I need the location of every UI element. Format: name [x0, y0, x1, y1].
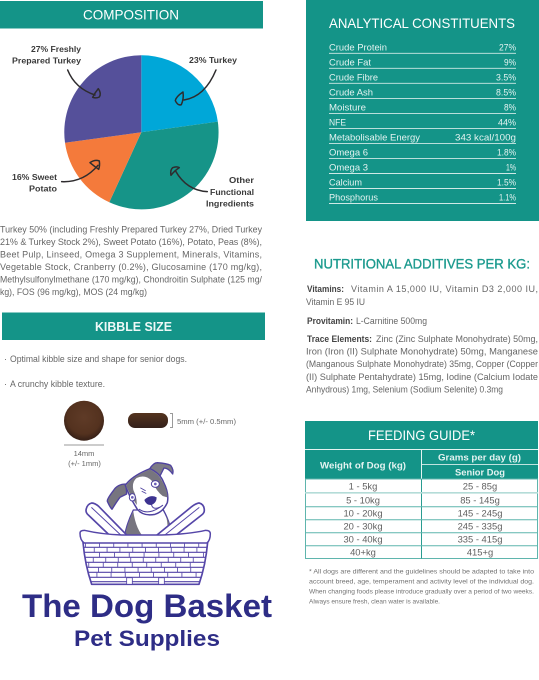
text block: additives: Vitamins: [307, 284, 344, 294]
text block: additives: Anhydrous) 1mg, Selenium (Sodium Selenite) 0.3mg [306, 384, 503, 394]
feeding guide rows: 25 - 85g [463, 480, 497, 492]
feeding guide rows: 335 - 415g [458, 534, 502, 544]
feeding guide rows: 40+kg [350, 546, 376, 558]
text block: feeding footnote: When changing foods please introduce gradually over a period of two weeks. [309, 589, 534, 596]
table: constituents rows: 8% [504, 102, 516, 114]
feeding guide header: Grams per day (g) [438, 452, 521, 464]
table: constituents rows: 44% [498, 118, 517, 128]
feeding guide rows: 20 - 30kg [343, 520, 383, 532]
text block: composition ingredients: 21% & Turkey Stock 2%), Sweet Potato (16%), Potato, Peas (8%), [0, 237, 262, 247]
table: constituents rows: 343 kcal/100g [455, 132, 516, 144]
feeding guide rows: 5 - 10kg [346, 494, 380, 506]
pie labels and arrows: 27% Freshly [31, 44, 81, 54]
table: constituents rows: 27% [499, 42, 516, 54]
logo: dog in a basket [80, 463, 210, 584]
text block: additives: Vitamin A 15,000 IU, Vitamin D3 2,000 IU, [351, 284, 538, 294]
icon: kibble side view: 5mm (+/- 0.5mm) [177, 417, 237, 426]
table: constituents rows: Crude Ash [329, 88, 373, 98]
table: constituents rows: Calcium [329, 178, 362, 188]
text block: kibble bullets: A crunchy kibble texture. [10, 379, 105, 389]
panel: analytical constituents [306, 0, 539, 221]
table: constituents rows: Omega 3 [329, 162, 368, 174]
table: constituents rows: 1.5% [497, 178, 516, 188]
basket body [83, 542, 208, 584]
text block: additives: Provitamin: [307, 316, 353, 326]
icon: kibble side view [128, 413, 237, 428]
icon: kibble top view [64, 401, 104, 468]
text block: kibble bullets [4, 354, 187, 389]
panel: kibble size heading [2, 312, 265, 340]
text block: feeding footnote: * All dogs are different and the guidelines should be adapted to take into [309, 568, 534, 575]
table: constituents rows: Omega 6 [329, 148, 368, 158]
text block: composition ingredients: Methylsulfonylmethane (170 mg/kg), Chondroitin Sulphate (125 mg/ [0, 274, 262, 284]
table: feeding guide [305, 421, 538, 558]
table: constituents rows [329, 42, 517, 204]
pie labels and arrows: Other [229, 175, 255, 185]
heading: analytical constituents: ANALYTICAL CONSTITUENTS [329, 15, 515, 31]
text block: composition ingredients: kg), FOS (96 mg/kg), MOS (24 mg/kg) [0, 287, 147, 297]
feeding guide rows: 245 - 335g [458, 520, 502, 532]
text block: feeding footnote: account breed, age, temperament and activity level of the individual dog. [309, 578, 534, 586]
table: constituents rows: Moisture [329, 102, 366, 114]
table: constituents rows: Crude Fat [329, 58, 371, 68]
icon: kibble top view: (+/- 1mm) [68, 459, 101, 468]
feeding guide rows: 145 - 245g [458, 508, 502, 518]
pie labels and arrows: Functional [210, 187, 254, 197]
text block: additives: Trace Elements: [307, 334, 372, 344]
text block: composition ingredients: Beet Pulp, Linseed, Omega 3 Supplement, Minerals, Vitamins, [0, 250, 262, 260]
table: constituents rows: 1.8% [497, 148, 516, 158]
table: constituents rows: Crude Protein [329, 42, 387, 54]
feeding guide header: FEEDING GUIDE* [368, 427, 476, 443]
text block: feeding footnote [309, 568, 534, 606]
text block: composition ingredients: Turkey 50% (including Freshly Prepared Turkey 27%, Dried Turkey [0, 224, 262, 234]
table: constituents rows: 1.1% [499, 192, 516, 204]
panel: composition heading: COMPOSITION [83, 6, 179, 22]
table: constituents rows: 8.5% [496, 88, 517, 98]
table: constituents rows: NFE [329, 118, 346, 128]
text block: kibble bullets: · [4, 354, 7, 364]
feeding guide rows [305, 479, 538, 558]
text block: additives [306, 284, 538, 394]
icon: kibble top view: 14mm [74, 449, 94, 458]
table: constituents rows: 1% [506, 162, 516, 174]
feeding guide header: Senior Dog [455, 468, 505, 478]
basket rim [80, 530, 210, 543]
text block: additives: Zinc (Zinc Sulphate Monohydrate) 50mg, [376, 334, 538, 344]
text block: additives: Iron (Iron (II) Sulphate Monohydrate) 50mg, Manganese [306, 347, 538, 357]
text block: additives: L-Carnitine 500mg [356, 316, 427, 326]
table: constituents rows: Phosphorus [329, 192, 378, 204]
dog [107, 463, 173, 539]
logo text: Pet Supplies: Pet Supplies [74, 626, 220, 651]
text block: kibble bullets: Optimal kibble size and shape for senior dogs. [10, 354, 187, 364]
table: constituents rows: Metabolisable Energy [329, 132, 420, 144]
pie labels and arrows: 16% Sweet [12, 172, 57, 182]
pie labels and arrows: 23% Turkey [189, 55, 237, 65]
feeding guide header: Weight of Dog (kg) [320, 460, 406, 472]
text block: additives: Vitamin E 95 IU [306, 297, 365, 307]
pie chart: composition [64, 55, 219, 209]
pie labels and arrows [12, 44, 255, 208]
panel: composition heading [0, 1, 263, 28]
feeding guide rows: 10 - 20kg [343, 508, 383, 518]
table: constituents rows: Crude Fibre [329, 72, 378, 84]
table: constituents rows: 9% [504, 58, 516, 68]
text block: composition ingredients: Vegetable Stock, Cranberry (0.2%), Glucosamine (170 mg/kg), [0, 262, 262, 272]
feeding guide rows: 85 - 145g [460, 494, 500, 506]
feeding guide rows: 1 - 5kg [349, 480, 377, 492]
pie labels and arrows: Ingredients [206, 198, 254, 208]
panel: kibble size heading: KIBBLE SIZE [95, 319, 172, 334]
pie labels and arrows: Potato [29, 184, 57, 194]
feeding guide rows: 415+g [467, 546, 493, 558]
basket [80, 503, 210, 584]
feeding guide header [305, 421, 538, 479]
pie labels and arrows: Prepared Turkey [12, 56, 81, 66]
text block: kibble bullets: · [4, 379, 7, 389]
text block: feeding footnote: Always ensure fresh, clean water is available. [309, 598, 440, 606]
feeding guide rows: 30 - 40kg [343, 534, 383, 544]
text block: additives: (II) Sulphate Pentahydrate) 15mg, Iodine (Calcium Iodate [306, 372, 538, 382]
text block: composition ingredients [0, 224, 262, 297]
basket handles [86, 503, 204, 544]
heading: nutritional additives: NUTRITIONAL ADDITIVES PER KG: [314, 256, 530, 272]
table: constituents rows: 3.5% [496, 72, 517, 84]
logo text: The Dog Basket: The Dog Basket [22, 588, 272, 624]
